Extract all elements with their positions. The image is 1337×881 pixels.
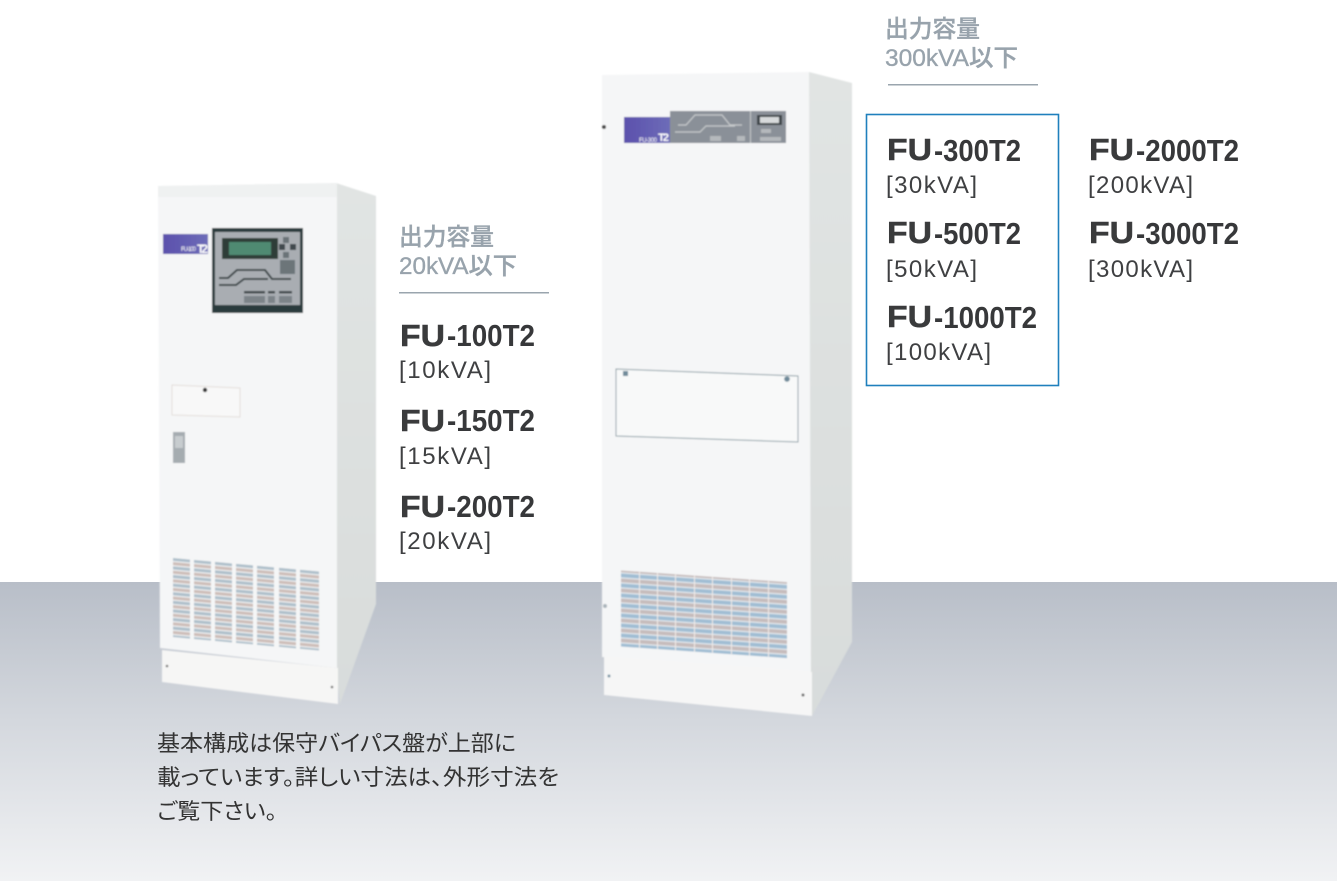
large cabinet plinth xyxy=(604,657,812,716)
large brand badge: FU-300 xyxy=(639,138,658,144)
model list: right column: [200kVA] xyxy=(1088,172,1193,199)
product photo: small cabinet xyxy=(158,183,376,704)
door handle xyxy=(173,432,185,463)
model list: boxed column: [50kVA] xyxy=(886,256,977,283)
heading: up to 20kVA xyxy=(399,224,549,294)
model list: up to 20kVA: -200T2 xyxy=(447,489,535,524)
large access panel xyxy=(616,369,798,442)
model list: right column: -3000T2 xyxy=(1136,216,1239,251)
heading: up to 300kVA: 出力容量 xyxy=(885,16,980,43)
heading: up to 20kVA: 20kVA以下 xyxy=(399,253,517,280)
model list: boxed column: FU xyxy=(887,132,932,167)
large cabinet side face xyxy=(809,72,852,716)
model list: up to 20kVA: [10kVA] xyxy=(399,357,491,384)
large brand badge xyxy=(624,117,670,144)
cabinet plinth xyxy=(162,650,338,704)
model list: right column: [300kVA] xyxy=(1088,256,1193,283)
model list: boxed column xyxy=(886,132,1037,366)
model list: right column xyxy=(1088,132,1239,283)
model list: boxed column: -500T2 xyxy=(934,216,1021,251)
caption xyxy=(157,731,559,824)
model list: up to 20kVA: FU xyxy=(400,403,445,438)
model list: right column: FU xyxy=(1089,215,1134,250)
large cabinet front face xyxy=(602,72,811,680)
small access panel xyxy=(172,385,240,417)
model list: boxed column: -300T2 xyxy=(934,133,1021,168)
model list: boxed column: [30kVA] xyxy=(886,172,977,199)
model list: boxed column: FU xyxy=(887,299,932,334)
model list: up to 20kVA xyxy=(399,318,535,555)
model list: up to 20kVA: FU xyxy=(400,489,445,524)
caption: 基本構成は保守バイパス盤が上部に xyxy=(157,731,516,756)
large control panel xyxy=(670,111,786,143)
heading: up to 20kVA: 出力容量 xyxy=(399,224,494,251)
highlighted model box xyxy=(866,114,1058,386)
model list: up to 20kVA: -150T2 xyxy=(447,403,535,438)
model list: up to 20kVA: [15kVA] xyxy=(399,443,491,470)
brand badge: T2 xyxy=(197,242,208,256)
control panel xyxy=(212,228,303,313)
model list: boxed column: FU xyxy=(887,215,932,250)
large ventilation grille xyxy=(621,570,787,658)
model list: up to 20kVA: FU xyxy=(400,318,445,353)
brand badge xyxy=(163,234,208,256)
model list: up to 20kVA: [20kVA] xyxy=(399,528,491,555)
model list: right column: -2000T2 xyxy=(1136,133,1239,168)
cabinet top edge xyxy=(158,183,337,197)
heading: up to 300kVA: 300kVA以下 xyxy=(885,45,1018,72)
model list: up to 20kVA: -100T2 xyxy=(447,318,535,353)
model list: right column: FU xyxy=(1089,132,1134,167)
floor background xyxy=(0,582,1337,881)
large brand badge: T2 xyxy=(658,132,669,144)
model list: boxed column: [100kVA] xyxy=(886,339,991,366)
heading: up to 300kVA xyxy=(885,16,1038,86)
brand badge: FU-100 xyxy=(181,247,197,253)
caption: ご覧下さい。 xyxy=(157,799,277,824)
cabinet front face xyxy=(158,183,337,668)
product photo: large cabinet xyxy=(602,72,852,716)
ventilation grille xyxy=(173,558,319,651)
cabinet side face xyxy=(336,183,376,704)
model list: boxed column: -1000T2 xyxy=(934,300,1037,335)
caption: 載っています。詳しい寸法は、外形寸法を xyxy=(157,765,559,790)
